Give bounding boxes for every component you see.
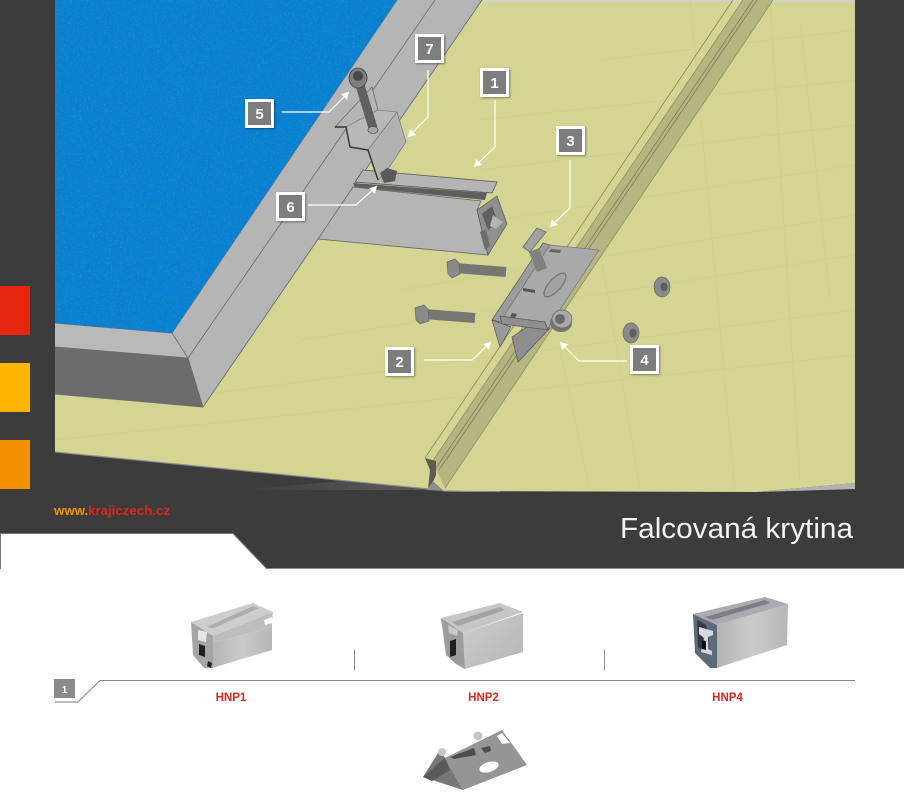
label HNP4: HNP4 xyxy=(712,692,743,704)
callout 6 xyxy=(278,186,377,220)
title: Falcovaná krytina xyxy=(620,513,854,545)
section rule with number badge xyxy=(54,679,855,702)
socket bolt xyxy=(349,68,378,134)
white tab xyxy=(0,533,267,569)
product: HNP4 rail xyxy=(693,597,788,668)
washer xyxy=(550,310,572,332)
solar panel xyxy=(55,0,482,407)
dark header band xyxy=(0,0,904,568)
roof installation illustration xyxy=(55,0,855,492)
colour tabs xyxy=(0,286,30,489)
hook plate on seam xyxy=(492,243,599,362)
callout 7: 7 xyxy=(425,41,434,58)
standing seam xyxy=(425,0,773,491)
callout 3 xyxy=(550,128,584,227)
callout 4 xyxy=(560,342,658,372)
label HNP1: HNP1 xyxy=(216,692,247,704)
callout 1 xyxy=(474,70,508,167)
callout 4: 4 xyxy=(640,352,649,369)
website link: www.krajiczech.cz xyxy=(53,503,171,518)
roof lower edge xyxy=(55,452,500,492)
callout 5 xyxy=(246,92,349,126)
callout 5: 5 xyxy=(255,106,264,123)
callout 2: 2 xyxy=(395,354,404,371)
flange nuts xyxy=(623,277,670,343)
callout 3: 3 xyxy=(566,133,575,150)
T-bolt xyxy=(523,228,546,270)
blue photovoltaic surface xyxy=(55,0,397,333)
callout 1: 1 xyxy=(490,75,499,92)
callout 6: 6 xyxy=(286,199,295,216)
clamp bracket xyxy=(335,87,406,180)
dividers xyxy=(354,650,605,670)
product: HNP2 rail xyxy=(441,603,523,669)
T-nut xyxy=(380,168,397,183)
mounting rail xyxy=(318,170,507,255)
panel frame xyxy=(172,0,482,407)
product: hook bracket xyxy=(423,730,527,790)
hex bolts xyxy=(415,259,506,324)
roof surface xyxy=(55,0,855,492)
section rule with number badge: 1 xyxy=(62,685,68,696)
callout 7 xyxy=(408,36,442,137)
product: HNP1 rail xyxy=(191,603,273,668)
label HNP2: HNP2 xyxy=(468,692,499,704)
callout 2 xyxy=(386,342,491,374)
